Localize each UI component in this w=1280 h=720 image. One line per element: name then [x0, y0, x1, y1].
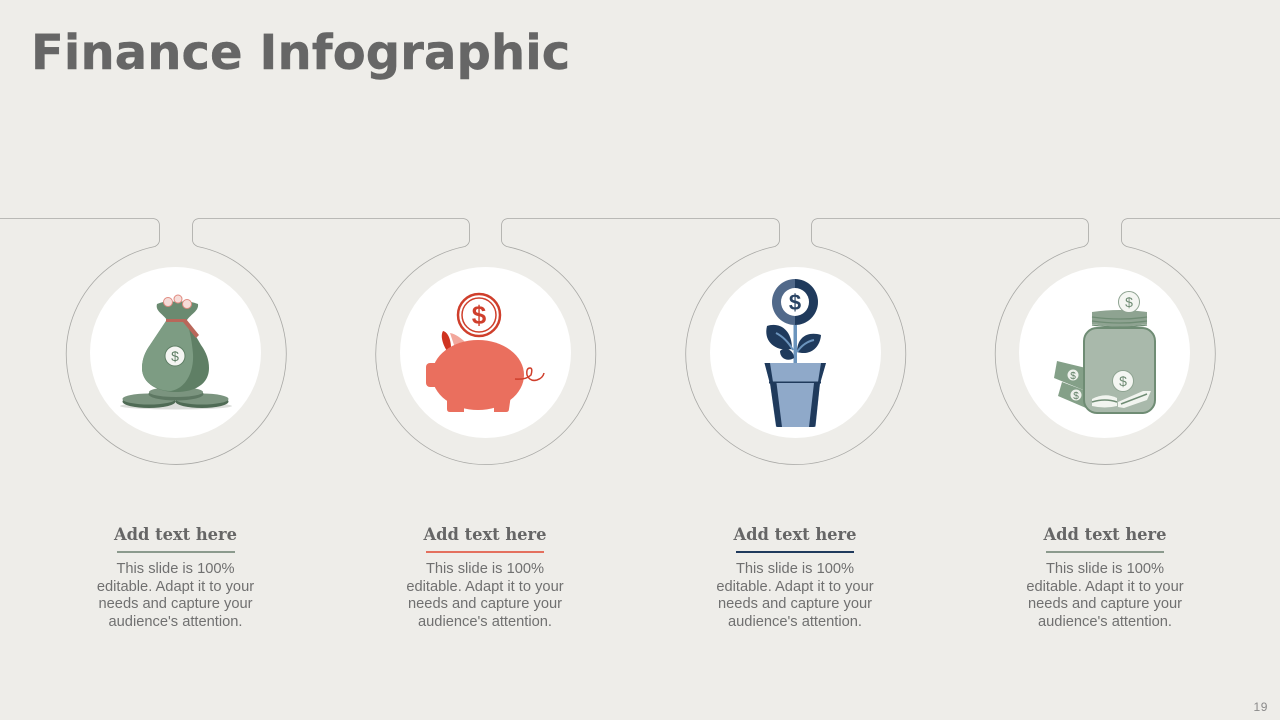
text block: needs and capture your: [718, 596, 872, 612]
text block: editable. Adapt it to your: [716, 579, 874, 595]
text block: This slide is 100%: [1046, 561, 1164, 577]
panel: caption 2: [406, 525, 564, 630]
heading: Add text here: [734, 525, 856, 544]
text block: editable. Adapt it to your: [1026, 579, 1184, 595]
icon: money jar: $: [1070, 371, 1076, 382]
text block: audience's attention.: [108, 614, 242, 630]
text block: editable. Adapt it to your: [97, 579, 254, 595]
panel: caption 4: [1026, 525, 1184, 630]
text block: needs and capture your: [408, 596, 562, 612]
text block: audience's attention.: [418, 614, 552, 630]
icon: money jar: $: [1119, 373, 1127, 389]
panel: caption 3: [716, 525, 874, 630]
text block: audience's attention.: [1038, 614, 1172, 630]
heading: Add text here: [114, 525, 237, 544]
text block: This slide is 100%: [736, 561, 854, 577]
text block: needs and capture your: [1028, 596, 1182, 612]
text block: needs and capture your: [98, 596, 252, 612]
icon: money plant in pot: $: [789, 290, 801, 315]
divider: [426, 551, 544, 553]
panel: caption 1: [97, 525, 254, 630]
text block: This slide is 100%: [426, 561, 544, 577]
heading: Add text here: [424, 525, 546, 544]
icon: money bag: $: [171, 348, 179, 364]
text block: This slide is 100%: [116, 561, 235, 577]
text block: audience's attention.: [728, 614, 862, 630]
text block: [716, 561, 874, 630]
divider: [736, 551, 854, 553]
icon: piggy bank: $: [472, 300, 487, 330]
icon: money jar: $: [1073, 391, 1079, 402]
title: Finance Infographic: [31, 25, 570, 81]
icon: money jar: $: [1125, 294, 1133, 310]
heading: Add text here: [1044, 525, 1166, 544]
text block: editable. Adapt it to your: [406, 579, 564, 595]
page number: 19: [1253, 700, 1268, 714]
text block: [406, 561, 564, 630]
divider: [1046, 551, 1164, 553]
divider: [116, 551, 234, 553]
text block: [1026, 561, 1184, 630]
text block: [97, 561, 254, 630]
